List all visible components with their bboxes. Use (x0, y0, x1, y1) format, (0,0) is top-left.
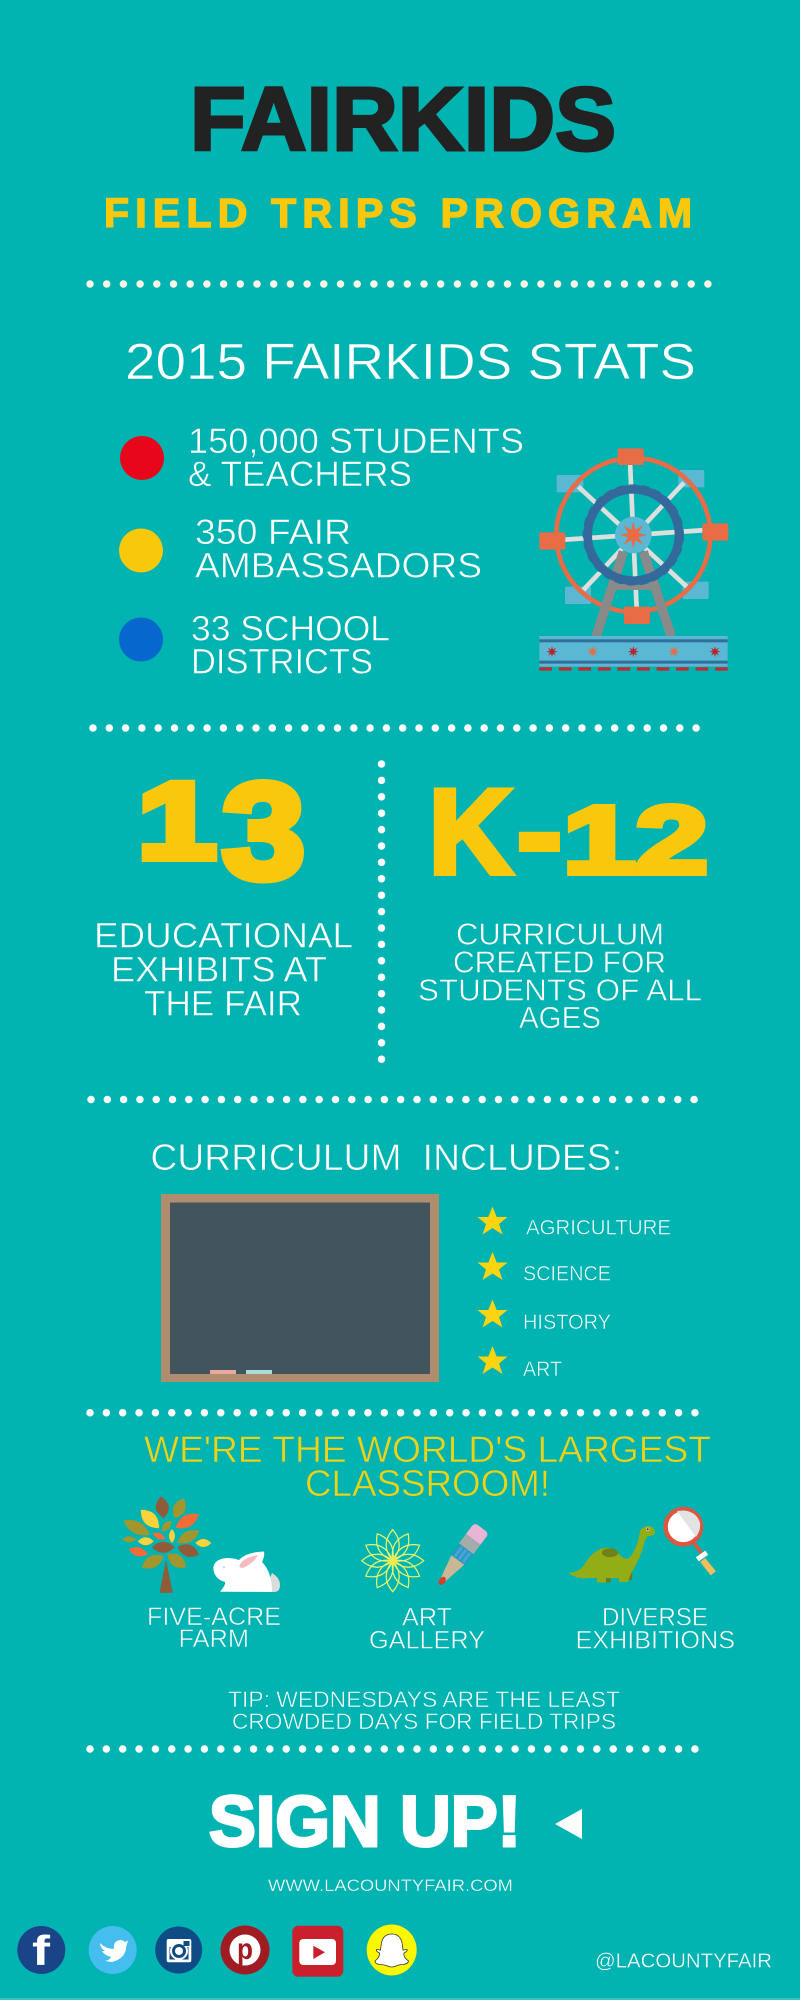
star (478, 1252, 508, 1280)
label: diverse exhibitions: EXHIBITIONS (576, 1626, 735, 1654)
call to action: sign up: SIGN UP! (209, 1783, 521, 1862)
stat: school districts: DISTRICTS (191, 642, 373, 682)
big number: K-12: K (429, 765, 512, 899)
social handle: @LACOUNTYFAIR (595, 1950, 772, 1972)
subtitle: FIELD TRIPS PROGRAM (104, 190, 692, 236)
icon: pinterest (220, 1926, 270, 1974)
icon: chalkboard (161, 1194, 439, 1382)
icon: facebook (17, 1926, 65, 1974)
stat: ambassadors: 350 FAIR (195, 513, 351, 552)
text: curriculum for all ages: CREATED FOR (453, 944, 666, 980)
text: curriculum for all ages: STUDENTS OF ALL (418, 972, 702, 1008)
heading: world's largest classroom: CLASSROOM! (305, 1463, 550, 1504)
icon: snapchat (367, 1924, 417, 1976)
big number: K-12: 12 (563, 787, 708, 894)
label: five-acre farm: FIVE-ACRE (147, 1603, 281, 1631)
subject: science: SCIENCE (523, 1262, 611, 1286)
arrow (555, 1809, 582, 1839)
icon: ferris wheel (539, 448, 728, 669)
icon: rabbit (213, 1552, 280, 1592)
text: educational exhibits: EXHIBITS AT (111, 950, 327, 990)
heading: world's largest classroom: WE'RE THE WORLD'S LARGEST (144, 1429, 711, 1470)
star (478, 1300, 508, 1328)
icon: facebook: f (32, 1927, 51, 1974)
stat: school districts: 33 SCHOOL (191, 610, 390, 648)
bullet: blue (119, 618, 163, 662)
star (478, 1206, 508, 1234)
social icons (17, 1924, 417, 1977)
icon: instagram (155, 1926, 202, 1974)
list: curriculum subjects (478, 1206, 671, 1381)
stat: ambassadors: AMBASSADORS (195, 546, 482, 586)
icon: tree (121, 1496, 211, 1593)
icon: youtube (292, 1926, 343, 1977)
bullet: red (120, 436, 164, 480)
label: diverse exhibitions: DIVERSE (602, 1604, 708, 1632)
icon: magnifying glass (666, 1509, 713, 1573)
icon: twitter (89, 1926, 137, 1974)
label: art gallery: ART (402, 1604, 452, 1632)
subject: agriculture: AGRICULTURE (526, 1216, 671, 1240)
star (478, 1346, 508, 1374)
big number: K-12: - (517, 765, 562, 899)
text: educational exhibits: EDUCATIONAL (94, 916, 353, 956)
label: five-acre farm: FARM (178, 1625, 249, 1653)
icon: paint brush (432, 1523, 489, 1590)
big number: 13: 1 (138, 760, 216, 881)
icon: pinterest: p (237, 1933, 253, 1966)
tip text: CROWDED DAYS FOR FIELD TRIPS (232, 1709, 616, 1734)
text: educational exhibits: THE FAIR (144, 984, 302, 1024)
stat: students and teachers: 150,000 STUDENTS (188, 422, 524, 461)
website url: WWW.LACOUNTYFAIR.COM (268, 1876, 513, 1895)
heading: curriculum includes: CURRICULUM INCLUDES: (150, 1137, 622, 1178)
subject: art: ART (523, 1358, 562, 1381)
big number: 13: 3 (222, 755, 305, 907)
label: art gallery: GALLERY (369, 1626, 485, 1654)
heading: stats: 2015 FAIRKIDS STATS (125, 333, 696, 390)
stat: students and teachers: & TEACHERS (188, 455, 412, 494)
title: FAIRKIDS (190, 70, 616, 170)
text: curriculum for all ages: AGES (519, 1000, 601, 1035)
tip text: TIP: WEDNESDAYS ARE THE LEAST (228, 1687, 620, 1712)
text: curriculum for all ages: CURRICULUM (456, 916, 664, 952)
panel: stats list (119, 422, 524, 682)
subject: history: HISTORY (523, 1311, 611, 1334)
icon: dinosaur (568, 1526, 655, 1582)
bullet: yellow (119, 528, 163, 572)
icon: flower (362, 1530, 424, 1592)
